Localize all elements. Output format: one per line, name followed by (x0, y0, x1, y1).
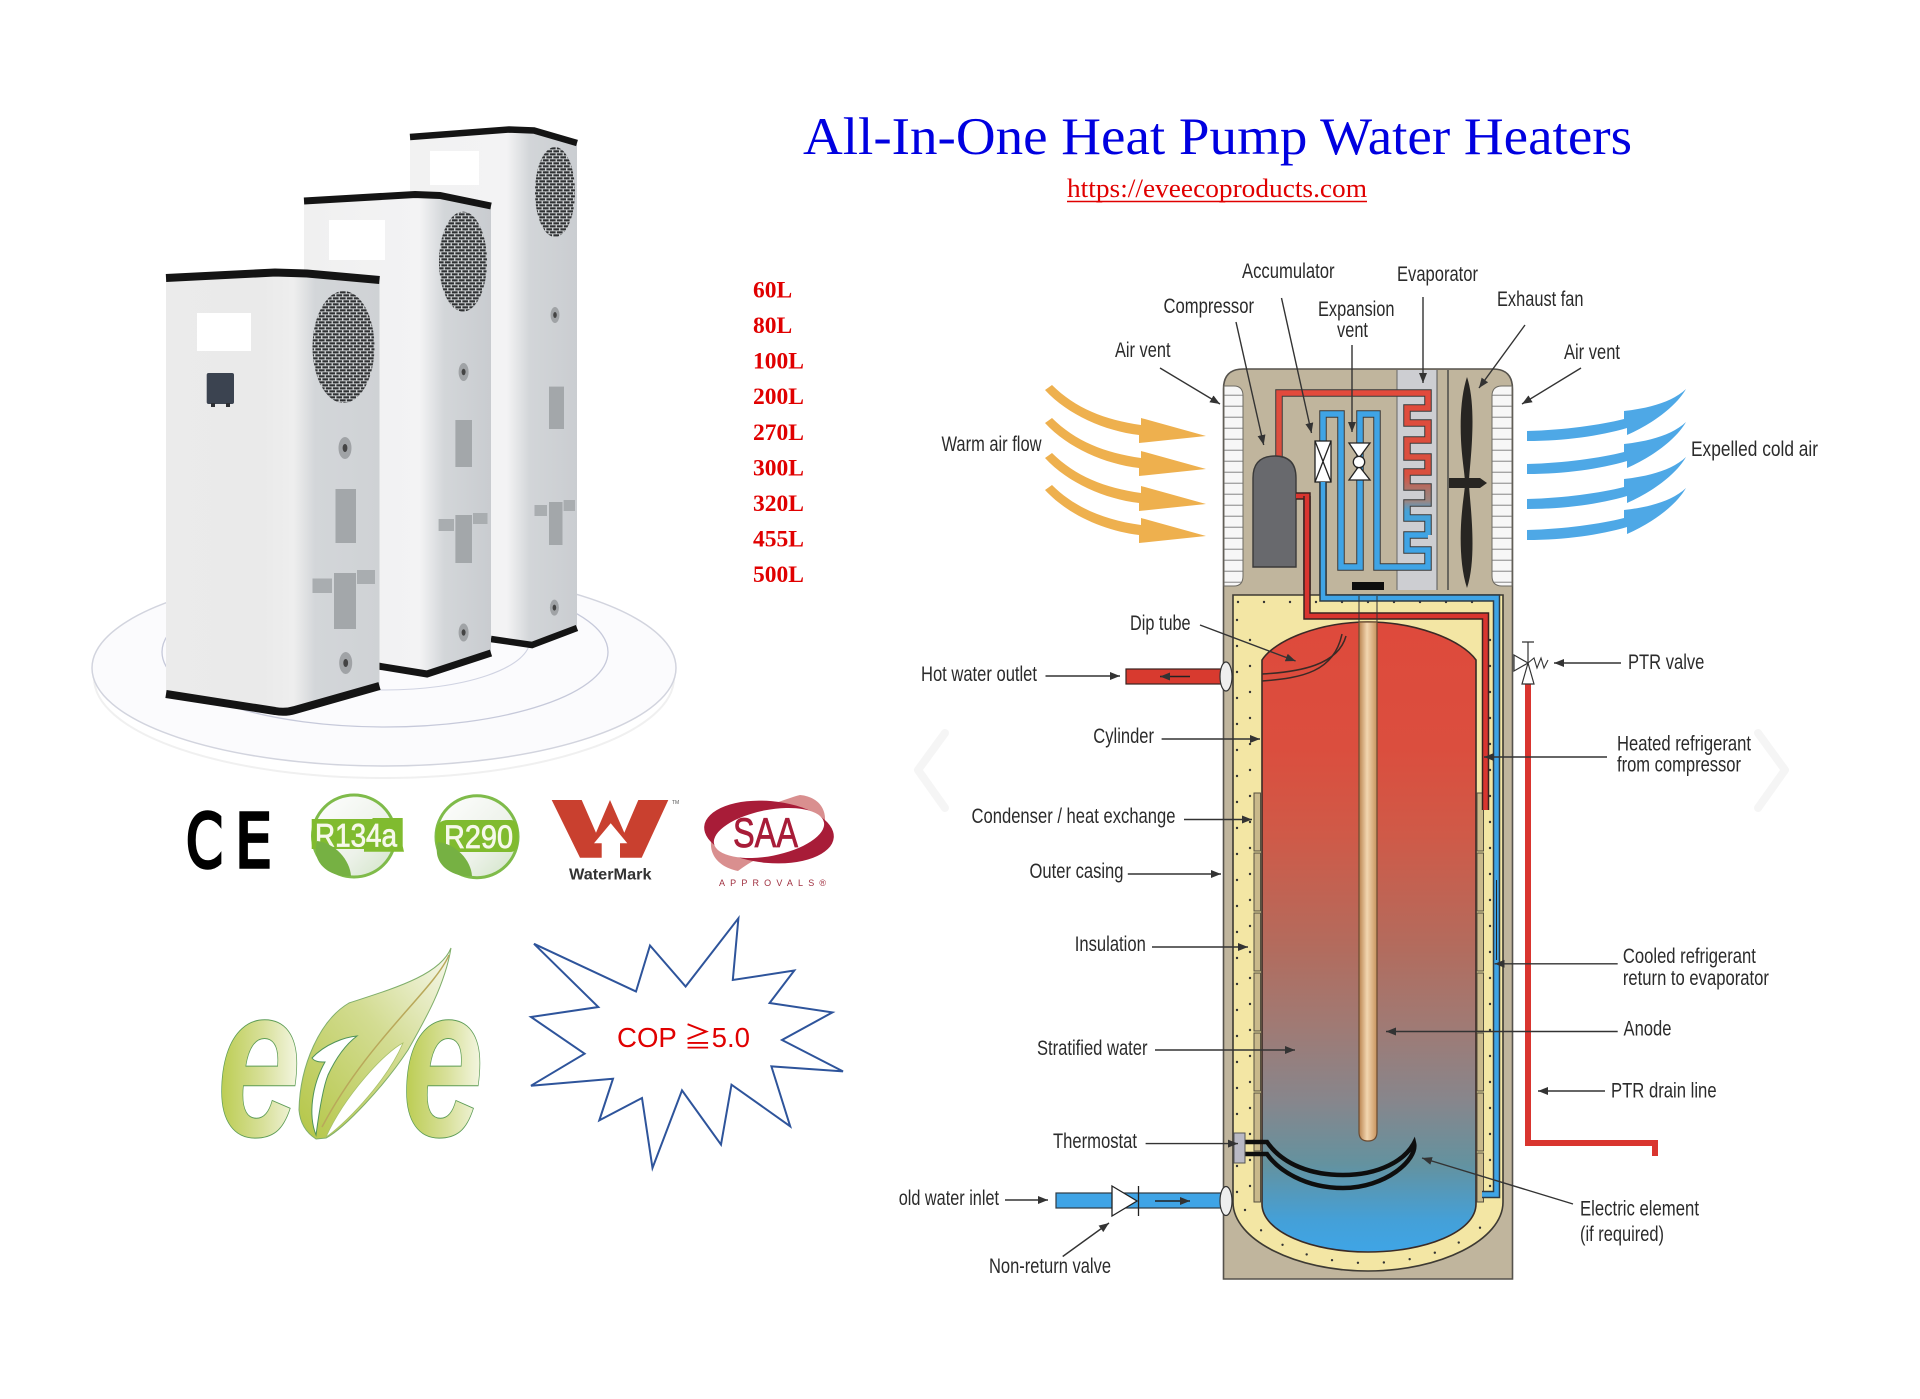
certification logo: SAA approvals (702, 795, 836, 888)
capacity list: 300L (753, 455, 804, 481)
starburst callout: COP: COP ≧5.0 (617, 1022, 750, 1053)
anode rod (1359, 596, 1377, 1141)
compressor (1253, 456, 1296, 567)
certification badge: R290 (436, 796, 518, 878)
label: thermostat: Thermostat (1053, 1130, 1137, 1153)
label: cooled refrigerant (1495, 945, 1769, 990)
air vents (1224, 386, 1512, 586)
label: cooled refrigerant: return to evaporator (1623, 967, 1769, 990)
product photo: three heat pump units on platform (92, 130, 676, 778)
certification logo: SAA approvals: SAA (733, 809, 798, 856)
label: insulation: Insulation (1075, 933, 1146, 956)
capacity list: 455L (753, 527, 804, 553)
eve logo: e (217, 940, 301, 1182)
certification logo: SAA approvals: APPROVALS® (719, 878, 826, 888)
capacity list (753, 278, 804, 588)
eve logo: e (402, 940, 484, 1182)
label: cold water inlet (clipped at left): Cold water inlet (887, 1187, 999, 1210)
heat pump cabinet and tank casing (1224, 369, 1512, 1279)
title: All-In-One Heat Pump Water Heaters (803, 108, 1632, 166)
expelled cold air arrows (1527, 389, 1686, 540)
label: dip tube: Dip tube (1130, 612, 1191, 635)
label: PTR drain line: PTR drain line (1611, 1080, 1717, 1103)
label: air vent left (1115, 339, 1220, 404)
label: dip tube (1130, 612, 1296, 661)
label: air vent left: Air vent (1115, 339, 1171, 362)
label: evaporator (1397, 263, 1478, 383)
certification logo: WaterMark (552, 800, 679, 884)
label: accumulator: Accumulator (1242, 260, 1334, 283)
thermostat and electric element (1234, 1133, 1414, 1188)
insulation layer (1233, 595, 1503, 1271)
knobs and panels unit 1 (312, 437, 375, 674)
label: expansion vent: vent (1337, 319, 1368, 342)
label: non-return valve (989, 1223, 1111, 1278)
label: PTR valve: PTR valve (1628, 651, 1704, 674)
platform discs (92, 570, 676, 778)
unit 2 (middle) (304, 194, 491, 676)
dip tube (1262, 634, 1346, 681)
carousel chevrons (918, 733, 1785, 808)
certification badge: R134a (312, 795, 404, 877)
capacity list: 500L (753, 562, 804, 588)
condenser strips (1254, 793, 1484, 1202)
label: air vent right (1522, 341, 1620, 404)
label: heated refrigerant: Heated refrigerant (1617, 733, 1751, 756)
warm air flow arrows (1045, 385, 1206, 543)
exhaust fan (1449, 377, 1487, 588)
label: condenser / heat exchange: Condenser / heat exchange (972, 805, 1176, 828)
capacity list: 200L (753, 384, 804, 410)
label: hot water outlet: Hot water outlet (921, 663, 1037, 686)
expansion valve (1315, 441, 1370, 482)
label: anode: Anode (1624, 1018, 1672, 1041)
label: cooled refrigerant: Cooled refrigerant (1623, 945, 1756, 968)
water cylinder (1262, 622, 1476, 1252)
hot water outlet pipe (1126, 662, 1232, 691)
insulation dots (1237, 602, 1498, 1263)
label: electric element: Electric element (1580, 1198, 1699, 1221)
label: exhaust fan (1479, 288, 1584, 388)
certification logo: WaterMark: WaterMark (569, 866, 652, 884)
starburst callout: COP (531, 918, 843, 1168)
label: compressor (1164, 295, 1264, 445)
evaporator and expansion refrigerant pipes (1279, 393, 1428, 598)
certification badge: R134a: R134a (315, 818, 397, 854)
label: air vent right: Air vent (1564, 341, 1620, 364)
label: compressor: Compressor (1164, 295, 1254, 318)
website link: https://eveecoproducts.com (1067, 174, 1367, 203)
label: stratified water: Stratified water (1037, 1037, 1148, 1060)
unit 3 (tallest) (410, 130, 577, 647)
capacity list: 270L (753, 420, 804, 446)
label: evaporator: Evaporator (1397, 263, 1478, 286)
certification badge: R290: R290 (444, 819, 513, 855)
capacity list: 100L (753, 349, 804, 375)
label: accumulator (1242, 260, 1334, 433)
label: electric element: (if required) (1580, 1223, 1664, 1246)
certification logo: CE: C (186, 799, 223, 885)
label: heated refrigerant: from compressor (1617, 754, 1741, 777)
label: exhaust fan: Exhaust fan (1497, 288, 1584, 311)
capacity list: 60L (753, 278, 792, 304)
knobs and panels unit 2 (439, 363, 488, 642)
certification logo: CE (186, 799, 272, 885)
knobs and panels unit 3 (534, 307, 575, 616)
label: outer casing: Outer casing (1030, 860, 1124, 883)
label: non-return valve: Non-return valve (989, 1255, 1111, 1278)
label: expansion vent (1318, 298, 1394, 432)
capacity list: 80L (753, 313, 792, 339)
label: electric element (1422, 1158, 1699, 1246)
capacity list: 320L (753, 491, 804, 517)
label: cylinder: Cylinder (1093, 725, 1154, 748)
label: warm air flow: Warm air flow (942, 433, 1042, 456)
label: expelled cold air: Expelled cold air (1691, 438, 1818, 461)
certification logo: CE: E (235, 799, 272, 885)
unit 1 (front) (166, 272, 380, 714)
label: heated refrigerant (1484, 733, 1751, 777)
cold water inlet pipe and non-return valve (1056, 1186, 1232, 1216)
blue pipe lower section over insulation between evaporator and tank (1307, 482, 1323, 590)
label: expansion vent: Expansion (1318, 298, 1394, 321)
black control box (1352, 582, 1384, 590)
PTR valve and drain line (1514, 642, 1655, 1156)
refrigerant lines through tank (1296, 496, 1496, 1194)
eve logo (217, 940, 484, 1182)
evaporator panel (1397, 370, 1448, 590)
certification logo: WaterMark: TM (672, 800, 679, 806)
